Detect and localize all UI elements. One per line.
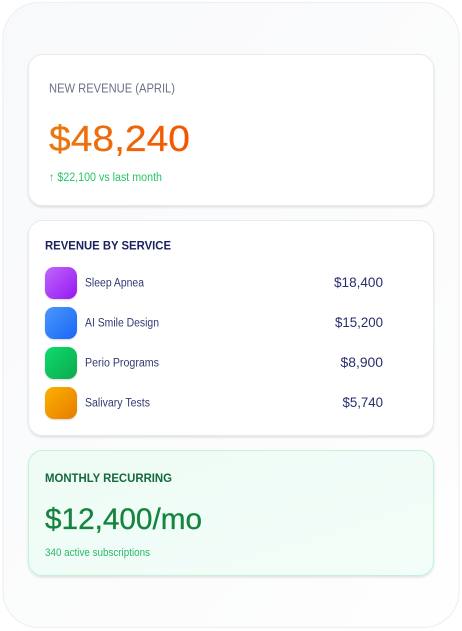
service amount: $8,900: [340, 355, 383, 370]
change versus last month: ↑ $22,100 vs last month: [49, 172, 162, 184]
icon: green swatch: [45, 347, 77, 379]
panel: revenue by service: [28, 220, 434, 436]
active subscriptions: 340 active subscriptions: [45, 547, 150, 559]
service name: AI Smile Design: [85, 318, 159, 330]
icon: blue swatch: [45, 307, 77, 339]
recurring amount: $12,400/mo: [45, 503, 202, 536]
service amount: $5,740: [342, 395, 383, 410]
service name: Salivary Tests: [85, 398, 150, 410]
row: perio programs: [45, 347, 383, 379]
panel: new revenue: [28, 54, 434, 206]
service name: Perio Programs: [85, 358, 159, 370]
heading: monthly recurring: MONTHLY RECURRING: [45, 471, 172, 485]
icon: amber swatch: [45, 387, 77, 419]
panel: monthly recurring: [28, 450, 434, 576]
row: ai smile design: [45, 307, 383, 339]
heading: revenue by service: REVENUE BY SERVICE: [45, 238, 171, 252]
service name: Sleep Apnea: [85, 278, 145, 290]
icon: purple swatch: [45, 267, 77, 299]
revenue amount: $48,240: [49, 118, 190, 159]
service amount: $15,200: [335, 315, 383, 330]
heading: new revenue: NEW REVENUE (APRIL): [49, 82, 175, 96]
row: sleep apnea: [45, 267, 383, 299]
service amount: $18,400: [334, 275, 383, 290]
row: salivary tests: [45, 387, 383, 419]
